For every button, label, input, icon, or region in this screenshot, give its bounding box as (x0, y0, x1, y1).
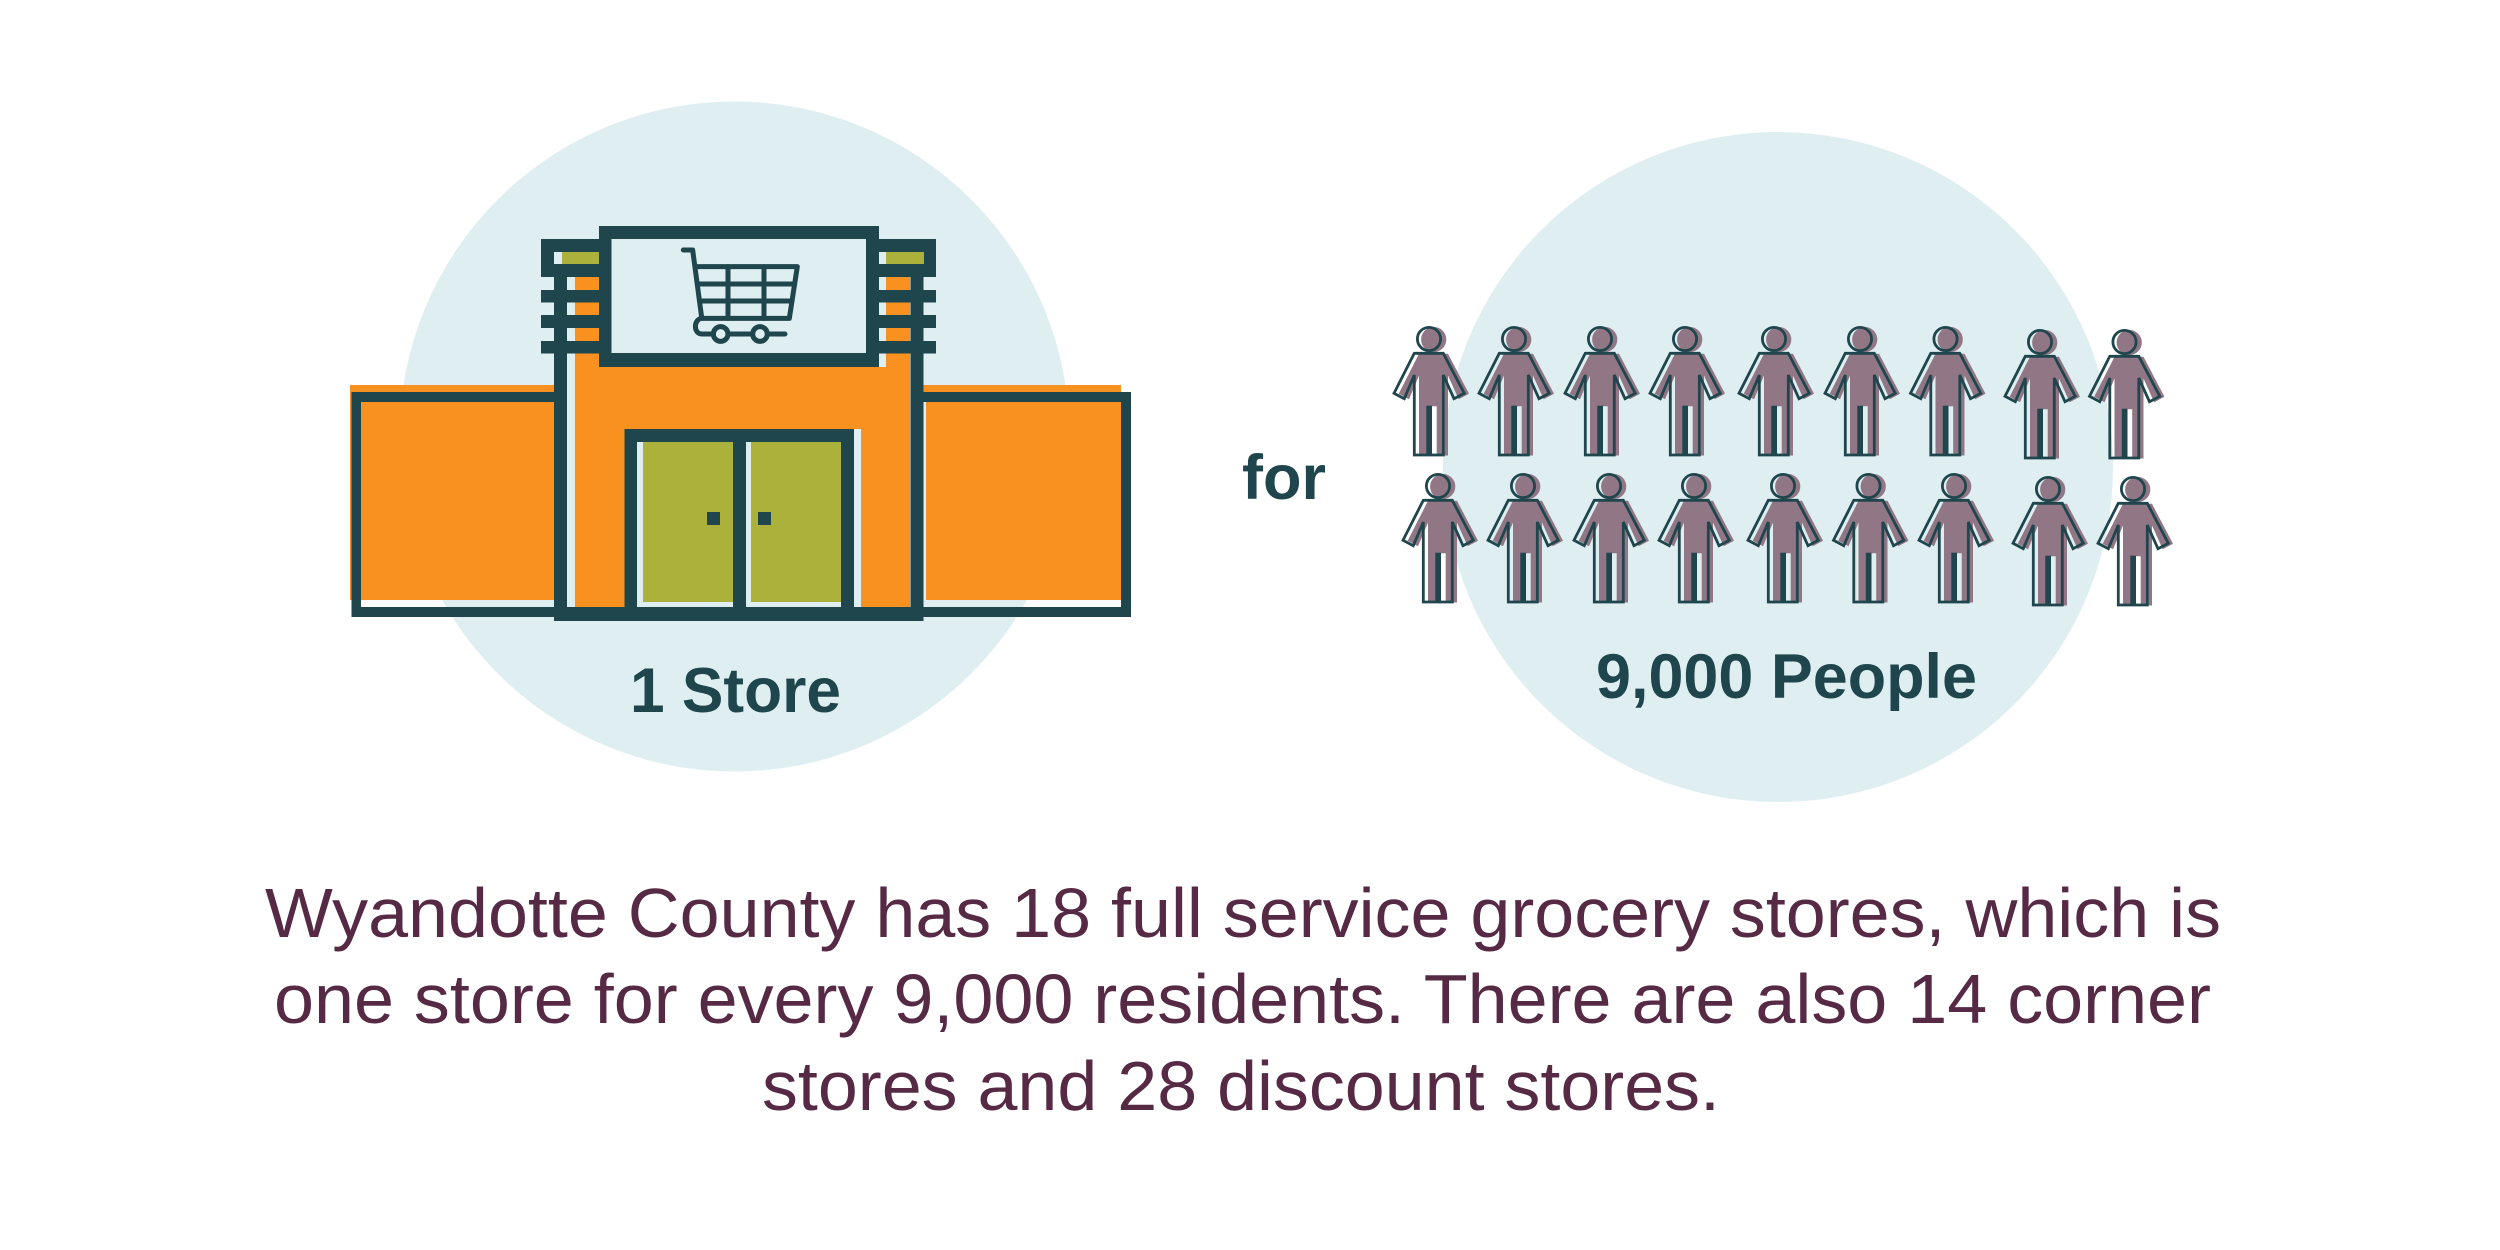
description text: Wyandotte County has 18 full service grocery stores, which is (265, 874, 2221, 952)
panel: store circle (400, 102, 1070, 772)
description text: one store for every 9,000 residents. There are also 14 corner (274, 960, 2211, 1038)
right sign bracket (879, 239, 936, 354)
sign board (599, 226, 879, 367)
panel: people circle (1443, 132, 2113, 802)
label: 9,000 People: 9,000 People (1596, 642, 1977, 712)
label: for: for (1242, 443, 1326, 513)
description text (265, 874, 2221, 1125)
people pictogram: 18 figures (1394, 327, 2173, 606)
left sign bracket (541, 239, 599, 354)
icon: shopping cart (683, 250, 797, 341)
label: 1 Store: 1 Store (630, 656, 841, 726)
double doors (624, 429, 854, 607)
facade (554, 239, 924, 621)
right wing (920, 385, 1131, 617)
icon: grocery store building (350, 226, 1131, 621)
description text: stores and 28 discount stores. (762, 1047, 1720, 1125)
left wing (350, 385, 560, 617)
